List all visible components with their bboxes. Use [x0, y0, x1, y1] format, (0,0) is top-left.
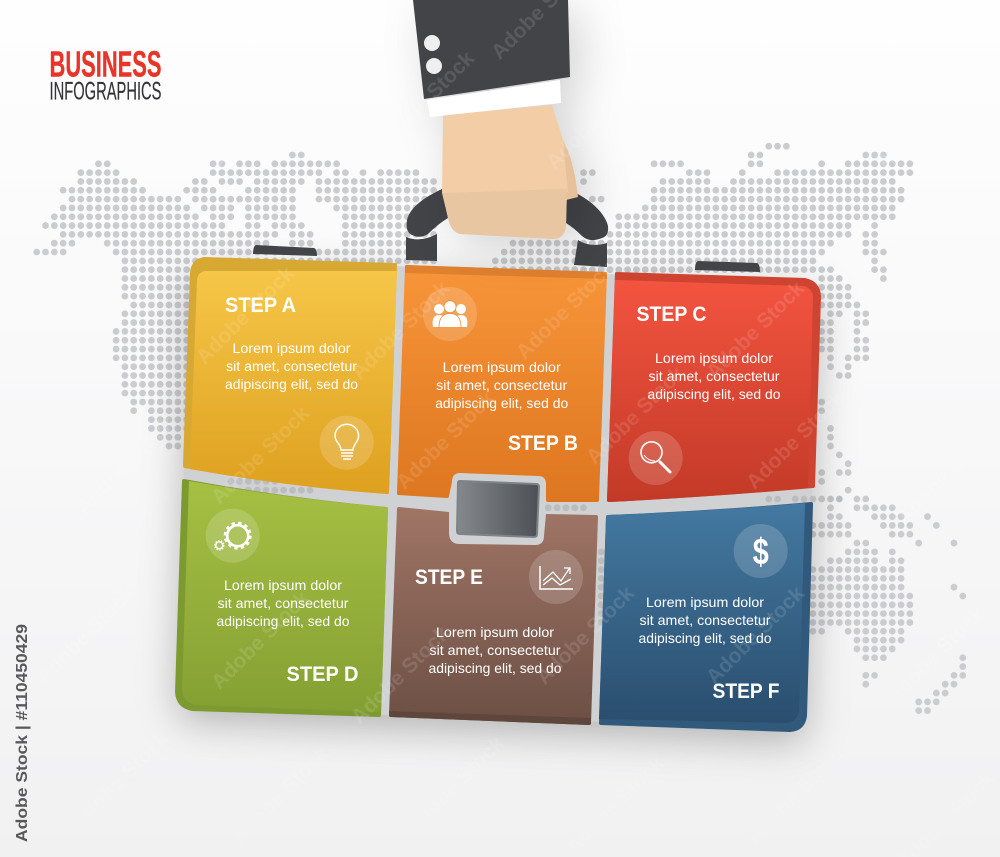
icon: light bulb — [320, 416, 374, 470]
text: step B: adipiscing elit, sed do — [435, 395, 568, 411]
watermark: Adobe Stock — [32, 582, 139, 689]
panel: step F — [599, 502, 813, 732]
watermark: Adobe Stock — [37, 92, 144, 199]
watermark: Adobe Stock — [742, 742, 849, 849]
watermark: Adobe Stock — [192, 262, 299, 369]
watermark: Adobe Stock — [402, 732, 509, 839]
text: step B: sit amet, consectetur — [436, 377, 568, 393]
text: step E: adipiscing elit, sed do — [428, 660, 562, 676]
text: step C: adipiscing elit, sed do — [648, 386, 781, 402]
briefcase back panel — [178, 262, 818, 730]
heading: step D: STEP D — [286, 663, 358, 686]
heading: step C: STEP C — [636, 303, 706, 326]
text: step F: Lorem ipsum dolor — [646, 594, 764, 610]
watermark: Adobe Stock — [392, 387, 499, 494]
text: step F: adipiscing elit, sed do — [638, 630, 772, 646]
briefcase latch — [457, 481, 539, 537]
hand fingers — [442, 189, 567, 239]
top tab left — [253, 245, 317, 256]
text: step C: Lorem ipsum dolor — [655, 350, 773, 366]
icon: line chart — [529, 550, 583, 604]
watermark: Adobe Stock — [512, 257, 619, 364]
hand — [413, 0, 578, 239]
text: step A: sit amet, consectetur — [226, 358, 357, 374]
title: Business Infographics — [50, 44, 162, 106]
text: step D: adipiscing elit, sed do — [216, 613, 350, 629]
text: step C: sit amet, consectetur — [648, 368, 780, 384]
text: step D: Lorem ipsum dolor — [224, 577, 342, 593]
handle right strap — [566, 189, 608, 240]
watermark: Adobe Stock — [67, 727, 174, 834]
jacket sleeve — [413, 0, 570, 99]
icon: dollar — [734, 524, 788, 578]
watermark: Adobe Stock — [892, 422, 999, 529]
text: step B: Lorem ipsum dolor — [443, 359, 561, 375]
sleeve buttons — [424, 35, 442, 74]
watermark: Adobe Stock — [532, 582, 639, 689]
text: step E: sit amet, consectetur — [430, 642, 561, 658]
text: step F — [638, 594, 772, 646]
watermark: Adobe Stock — [372, 47, 479, 154]
handle right foot — [574, 240, 607, 267]
watermark: Adobe Stock — [207, 402, 314, 509]
text: step A: Lorem ipsum dolor — [232, 340, 351, 356]
dots visible through gaps — [231, 481, 839, 623]
heading: step A: STEP A — [225, 294, 296, 317]
watermark: Adobe Stock — [347, 277, 454, 384]
text: step D — [216, 577, 350, 629]
panel: step E — [389, 507, 598, 725]
text: step F: sit amet, consectetur — [640, 612, 771, 628]
hand thumb — [560, 140, 578, 200]
panel: step B — [397, 265, 607, 502]
watermark: Adobe Stock — [892, 252, 999, 359]
watermark: Adobe Stock — [227, 742, 334, 849]
heading: step B: STEP B — [508, 432, 578, 455]
icon: magnifier — [629, 431, 683, 485]
watermark: Adobe Stock — [702, 582, 809, 689]
text: step D: sit amet, consectetur — [218, 595, 349, 611]
watermark: Adobe Stock — [737, 37, 844, 144]
handle — [406, 189, 608, 267]
panel: step A — [183, 257, 397, 494]
icon: dollar: $ — [753, 531, 769, 572]
watermark: Adobe Stock — [542, 67, 649, 174]
briefcase — [175, 0, 839, 732]
panel: step C — [607, 272, 821, 502]
shirt cuff — [427, 80, 561, 117]
text: step B — [435, 359, 568, 411]
watermark: Adobe Stock — [7, 282, 114, 389]
watermark: Adobe Stock — [72, 412, 179, 519]
heading: step F: STEP F — [712, 680, 780, 703]
watermark: Adobe Stock — [347, 622, 454, 729]
watermark: Adobe Stock — [207, 67, 314, 174]
heading: step E: STEP E — [415, 566, 483, 589]
text: step E — [428, 624, 562, 676]
panel: step D — [175, 479, 388, 717]
text: step C — [648, 350, 781, 402]
hand back — [442, 105, 568, 193]
text: step A: adipiscing elit, sed do — [225, 376, 358, 392]
top tab right — [695, 261, 760, 272]
title: Business Infographics: BUSINESS — [50, 44, 162, 84]
handle left strap — [407, 189, 448, 237]
handle left foot — [406, 234, 437, 261]
title: Business Infographics: INFOGRAPHICS — [50, 78, 162, 106]
watermark: Adobe Stock — [882, 602, 989, 709]
text: step E: Lorem ipsum dolor — [436, 624, 554, 640]
watermark: Adobe Stock — [207, 587, 314, 694]
icon: gears — [206, 509, 260, 563]
world map dots — [37, 146, 963, 711]
watermark: Adobe Stock — [562, 752, 669, 857]
text: step A — [225, 340, 358, 392]
icon: people — [423, 287, 477, 341]
side credit: Adobe Stock | #110450429 — [14, 624, 31, 842]
watermark: Adobe Stock — [702, 277, 809, 384]
watermark: Adobe Stock — [582, 362, 689, 469]
watermark: Adobe Stock — [872, 67, 979, 174]
watermark: Adobe Stock — [742, 387, 849, 494]
